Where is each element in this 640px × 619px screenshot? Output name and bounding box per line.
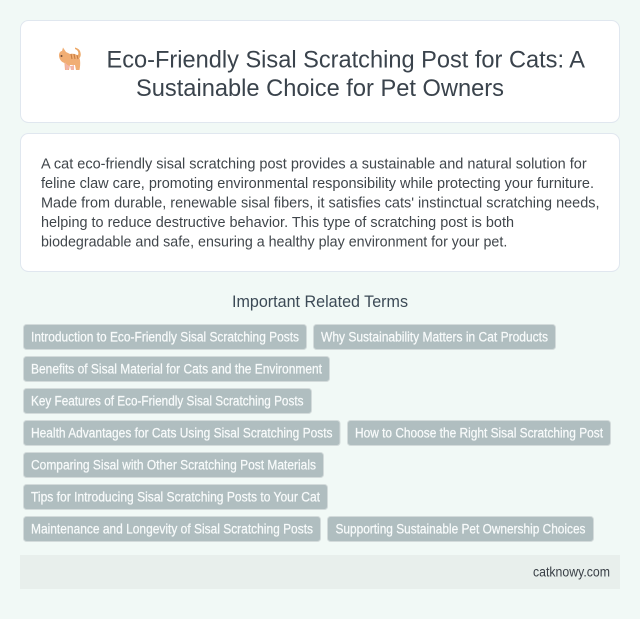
description text: Made from durable, renewable sisal fibers, it satisfies cats' instinctual scratching needs, [41,194,600,211]
description text: A cat eco-friendly sisal scratching post provides a sustainable and natural solution for [41,155,587,172]
tag: Benefits of Sisal Material for Cats and the Environment [31,362,322,376]
title text [106,46,586,102]
title text: Sustainable Choice for Pet Owners [136,75,504,102]
footer text: catknowy.com [533,564,610,579]
tag: Key Features of Eco-Friendly Sisal Scratching Posts [31,394,304,408]
tag: Tips for Introducing Sisal Scratching Posts to Your Cat [31,490,320,504]
footer [20,555,620,589]
description text: feline claw care, promoting environmental responsibility while protecting your furniture. [41,175,594,192]
tag [314,324,556,350]
tag [24,452,324,478]
tag: How to Choose the Right Sisal Scratching Post [355,426,603,440]
tag [24,484,328,510]
icon: cat [59,48,81,70]
tag list [24,324,610,542]
description text: helping to reduce destructive behavior. This type of scratching post is both [41,214,514,231]
description text: biodegradable and safe, ensuring a healthy play environment for your pet. [41,233,507,250]
panel: description [20,134,620,272]
tag [328,516,594,542]
tag: Introduction to Eco-Friendly Sisal Scratching Posts [31,330,299,344]
panel: title [20,20,620,122]
title text: Eco-Friendly Sisal Scratching Post for Cats: A [106,46,586,74]
description text [41,155,600,250]
tag [24,516,320,542]
heading: related terms: Important Related Terms [232,293,408,311]
tag: Why Sustainability Matters in Cat Products [321,330,548,344]
tag: Comparing Sisal with Other Scratching Post Materials [31,458,316,472]
tag [24,388,312,414]
tag [24,420,340,446]
tag [24,356,330,382]
tag: Supporting Sustainable Pet Ownership Choices [336,522,586,536]
tag [24,324,306,350]
tag [348,420,610,446]
tag: Health Advantages for Cats Using Sisal Scratching Posts [31,426,333,440]
tag: Maintenance and Longevity of Sisal Scratching Posts [31,522,313,536]
